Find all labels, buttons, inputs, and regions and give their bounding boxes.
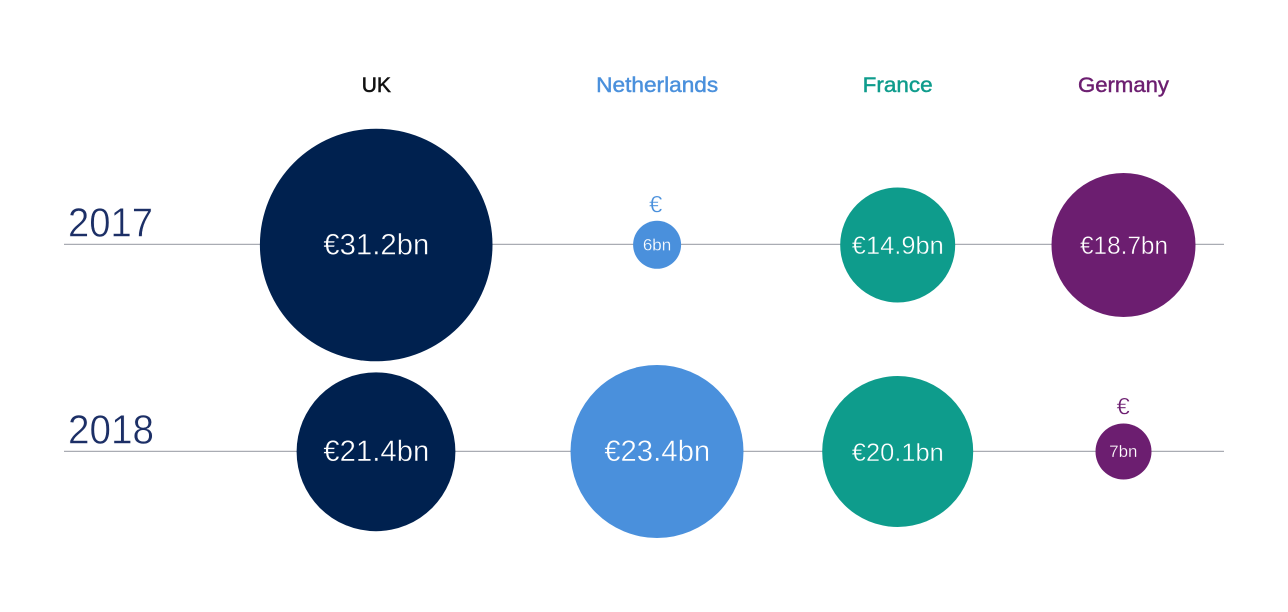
heading: UK: UK bbox=[362, 74, 391, 97]
bubble: Netherlands 2017: 6bn bbox=[643, 236, 671, 254]
bubble: France 2017 bbox=[840, 188, 955, 302]
heading: Germany: Germany bbox=[1078, 74, 1170, 97]
bubble: Germany 2018: 7bn bbox=[1109, 442, 1137, 461]
bubble: Germany 2017 bbox=[1052, 173, 1196, 317]
bubble: Netherlands 2018 bbox=[570, 365, 744, 538]
bubble: France 2018 bbox=[822, 376, 973, 527]
year label: 2017: 2017 bbox=[68, 200, 153, 246]
heading: France: France bbox=[863, 74, 933, 97]
bubble: Netherlands 2017: € bbox=[649, 192, 663, 219]
bubble: Netherlands 2018: €23.4bn bbox=[604, 435, 710, 468]
bubble: UK 2017 bbox=[260, 129, 493, 361]
bubble: Germany 2017: €18.7bn bbox=[1080, 232, 1168, 260]
heading: Netherlands: Netherlands bbox=[596, 74, 718, 97]
bubble: UK 2017: €31.2bn bbox=[323, 228, 429, 262]
bubble: France 2018: €20.1bn bbox=[852, 439, 944, 467]
year label: 2018: 2018 bbox=[68, 406, 154, 452]
bubble: UK 2018: €21.4bn bbox=[323, 435, 429, 468]
bubble: UK 2018 bbox=[297, 372, 455, 531]
bubble: France 2017: €14.9bn bbox=[852, 232, 944, 260]
bubble: Germany 2018 bbox=[1096, 394, 1152, 480]
bubble: Germany 2018: € bbox=[1117, 394, 1131, 421]
bubble: Netherlands 2017 bbox=[633, 192, 681, 269]
